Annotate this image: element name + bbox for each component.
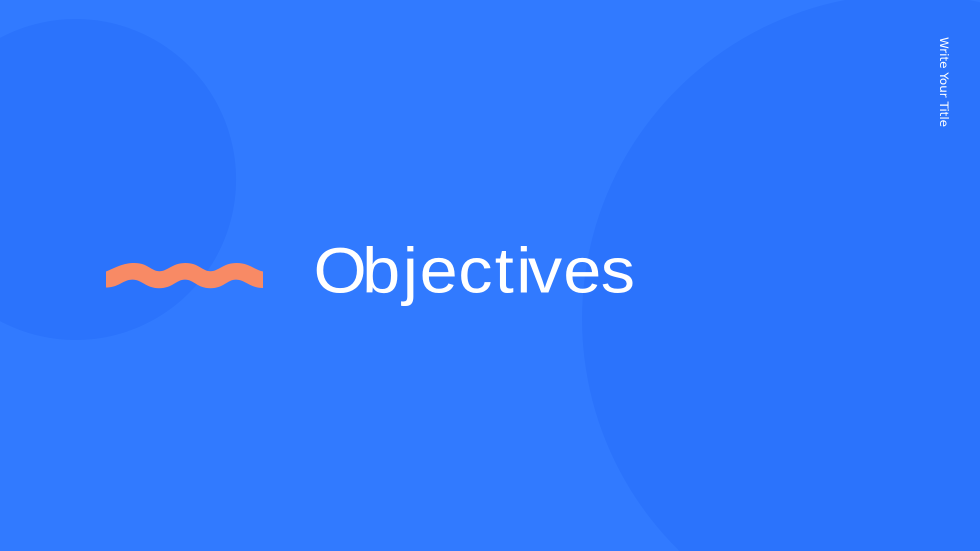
vertical title label: Write Your Title — [937, 37, 951, 127]
title: Objectives — [314, 236, 635, 307]
background circle: right — [582, 0, 980, 551]
background circle: left — [0, 19, 236, 340]
icon: orange wave — [106, 263, 263, 288]
